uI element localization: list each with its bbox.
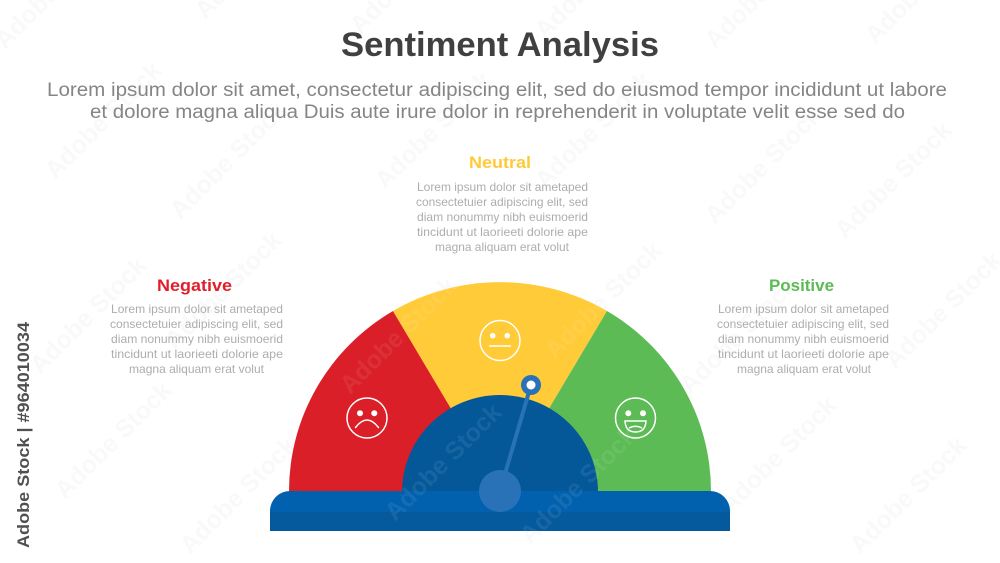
subtitle text block: et dolore magna aliqua Duis aute irure dolor in reprehenderit in voluptate velit esse sed do (90, 102, 905, 123)
body text: positive: tincidunt ut laorieeti dolorie ape (718, 347, 889, 361)
subtitle text block: Lorem ipsum dolor sit amet, consectetur adipiscing elit, sed do eiusmod tempor incididunt ut labore (47, 80, 947, 101)
watermark: diagonal stock marks on background: Adobe Stock (174, 431, 302, 559)
watermark: diagonal stock marks on background: Adobe Stock (39, 56, 167, 184)
heading: negative: Negative (157, 276, 232, 295)
title: Sentiment Analysis (341, 26, 659, 64)
gauge base (270, 491, 730, 531)
watermark: diagonal stock marks on background: Adobe Stock (334, 271, 462, 399)
body text: positive: magna aliquam erat volut (737, 362, 872, 376)
body text: positive: consectetuier adipiscing elit, sed (717, 317, 889, 331)
watermark: diagonal stock marks on background: Adobe Stock (699, 101, 827, 229)
gauge segment: positive (500, 311, 711, 491)
watermark: marks over the gauge (343, 286, 637, 531)
body text: negative: Lorem ipsum dolor sit ametaped (111, 302, 283, 316)
watermark: diagonal stock marks on background: Adobe Stock (369, 66, 497, 194)
body text: negative (110, 302, 283, 376)
watermark: marks over the gauge: Adobe Stock (514, 421, 642, 549)
icon: happy face (616, 398, 656, 438)
watermark: diagonal stock marks on background: Adobe Stock (539, 236, 667, 364)
body text: positive: diam nonummy nibh euismoerid (718, 332, 889, 346)
subtitle text block (47, 80, 947, 123)
body text: neutral: diam nonummy nibh euismoerid (417, 210, 588, 224)
icon: neutral face (480, 320, 520, 360)
body text: negative: diam nonummy nibh euismoerid (111, 332, 283, 346)
panel: neutral text (416, 153, 588, 254)
watermark: marks over the gauge: Adobe Stock (224, 326, 352, 454)
body text: negative: consectetuier adipiscing elit, sed (110, 317, 283, 331)
gauge chart (270, 282, 730, 531)
body text: positive: Lorem ipsum dolor sit ametaped (718, 302, 889, 316)
body text: neutral: magna aliquam erat volut (435, 240, 570, 254)
gauge segment: negative (289, 311, 500, 491)
gauge segment: neutral (393, 282, 607, 491)
body text: neutral (416, 180, 588, 254)
heading: positive: Positive (769, 276, 834, 295)
body text: positive (717, 302, 889, 376)
stock id label: Adobe Stock | #964010034 (14, 321, 33, 548)
watermark: diagonal stock marks on background: Adobe Stock (844, 431, 972, 559)
watermark: diagonal stock marks on background: Adobe Stock (164, 96, 292, 224)
watermark: marks over the gauge: Adobe Stock (379, 398, 507, 526)
body text: neutral: consectetuier adipiscing elit, sed (416, 195, 588, 209)
watermark: diagonal stock marks on background: Adobe Stock (714, 391, 842, 519)
watermark: marks over the gauge: Adobe Stock (539, 236, 667, 364)
panel: negative text (110, 276, 283, 376)
watermark: diagonal stock marks on background: Adobe Stock (49, 376, 177, 504)
needle (479, 375, 541, 512)
icon: sad face (347, 398, 387, 438)
watermark: marks over the gauge: Adobe Stock (334, 271, 462, 399)
watermark: diagonal stock marks on background: Adobe Stock (529, 66, 657, 194)
body text: negative: magna aliquam erat volut (129, 362, 265, 376)
watermark: diagonal stock marks on background: Adobe Stock (24, 251, 152, 379)
body text: neutral: tincidunt ut laorieeti dolorie ape (417, 225, 588, 239)
watermark: diagonal stock marks on background: Adobe Stock (829, 116, 957, 244)
gauge inner dome (402, 395, 598, 492)
watermark: marks over the gauge: Adobe Stock (674, 271, 802, 399)
watermark: diagonal stock marks on background: Adobe Stock (514, 421, 642, 549)
body text: negative: tincidunt ut laorieeti dolorie ape (111, 347, 283, 361)
heading: neutral: Neutral (469, 153, 531, 172)
panel: positive text (717, 276, 889, 376)
watermark: diagonal stock marks on background: Adobe Stock (159, 226, 287, 354)
watermark: diagonal stock marks on background: Adobe Stock (674, 271, 802, 399)
body text: neutral: Lorem ipsum dolor sit ametaped (417, 180, 588, 194)
